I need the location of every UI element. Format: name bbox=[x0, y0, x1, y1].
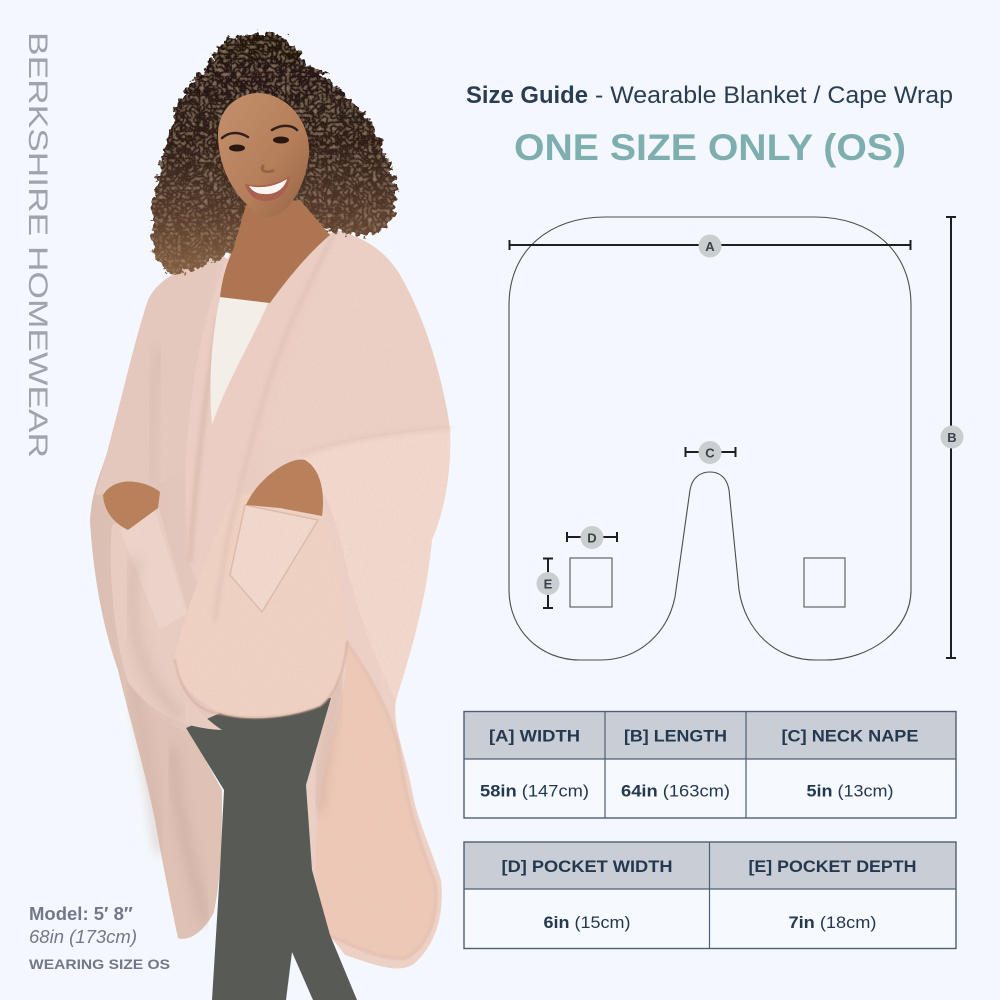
neck and chest bbox=[220, 200, 330, 303]
left pocket bbox=[120, 510, 187, 630]
dimension A: A bbox=[705, 239, 715, 254]
left pocket bbox=[570, 558, 612, 607]
table: pocket width, pocket depth bbox=[464, 842, 956, 948]
eyebrows bbox=[222, 126, 297, 138]
table: width, length, neck nape: [B] LENGTH bbox=[624, 726, 727, 746]
eyes bbox=[229, 144, 245, 152]
right pocket bbox=[804, 558, 845, 607]
blanket diagram bbox=[509, 217, 964, 660]
lower drape fold shadows bbox=[130, 650, 340, 920]
dimension C bbox=[686, 441, 736, 464]
model info text: 68in (173cm) bbox=[29, 927, 137, 947]
brand name vertical text: BERKSHIRE HOMEWEAR bbox=[23, 32, 53, 458]
centre front panels bbox=[185, 232, 338, 620]
dimension B: B bbox=[947, 430, 957, 445]
legs bbox=[186, 698, 357, 1000]
model photo bbox=[90, 33, 450, 1000]
title: - Wearable Blanket / Cape Wrap bbox=[595, 82, 953, 109]
dimension D bbox=[567, 526, 617, 549]
dimension A bbox=[510, 234, 910, 258]
table: pocket width, pocket depth: [D] POCKET WIDTH bbox=[502, 857, 672, 876]
cape fold shadows bbox=[132, 232, 450, 718]
table: pocket width, pocket depth: 7in (18cm) bbox=[788, 913, 876, 932]
cape back layer bbox=[90, 230, 449, 968]
table: pocket width, pocket depth: 6in (15cm) bbox=[544, 913, 630, 932]
table: width, length, neck nape: [C] NECK NAPE bbox=[782, 726, 918, 746]
dimension E bbox=[536, 558, 560, 608]
subtitle: ONE SIZE ONLY (OS) bbox=[514, 127, 906, 168]
nose shadow bbox=[262, 165, 274, 172]
face bbox=[218, 93, 309, 217]
right pocket bbox=[230, 505, 318, 612]
table: width, length, neck nape: [A] WIDTH bbox=[489, 726, 580, 746]
model info text: Model: 5′ 8″ bbox=[29, 903, 133, 924]
title: Size Guide bbox=[466, 82, 588, 109]
table: width, length, neck nape: 5in (13cm) bbox=[806, 782, 894, 800]
table: width, length, neck nape bbox=[464, 712, 956, 818]
model info text bbox=[29, 903, 170, 972]
model info text: WEARING SIZE OS bbox=[29, 956, 170, 972]
upper left shoulder bbox=[95, 255, 222, 495]
hair bbox=[152, 33, 397, 275]
table: width, length, neck nape: 64in (163cm) bbox=[621, 782, 730, 800]
lower left drape bbox=[118, 670, 222, 939]
front flap with pocket bbox=[174, 490, 347, 718]
right hand bbox=[246, 460, 323, 516]
left pocket panel bbox=[111, 505, 222, 730]
lining hem bbox=[327, 640, 436, 958]
left hand bbox=[103, 481, 160, 530]
dimension D: D bbox=[587, 530, 597, 546]
dimension C: C bbox=[705, 446, 715, 460]
table: width, length, neck nape: 58in (147cm) bbox=[480, 782, 589, 800]
right arm sleeve fold bbox=[296, 428, 450, 700]
dimension B bbox=[940, 217, 964, 658]
cape inner lining bbox=[316, 640, 436, 958]
white top bbox=[210, 297, 268, 425]
lips bbox=[245, 176, 290, 201]
teeth bbox=[249, 179, 287, 194]
upper right shoulder bbox=[262, 230, 450, 456]
dimension E: E bbox=[544, 576, 553, 592]
blanket outline bbox=[509, 217, 911, 660]
cape front layer bbox=[95, 230, 450, 730]
table: pocket width, pocket depth: [E] POCKET DEPTH bbox=[748, 857, 916, 876]
